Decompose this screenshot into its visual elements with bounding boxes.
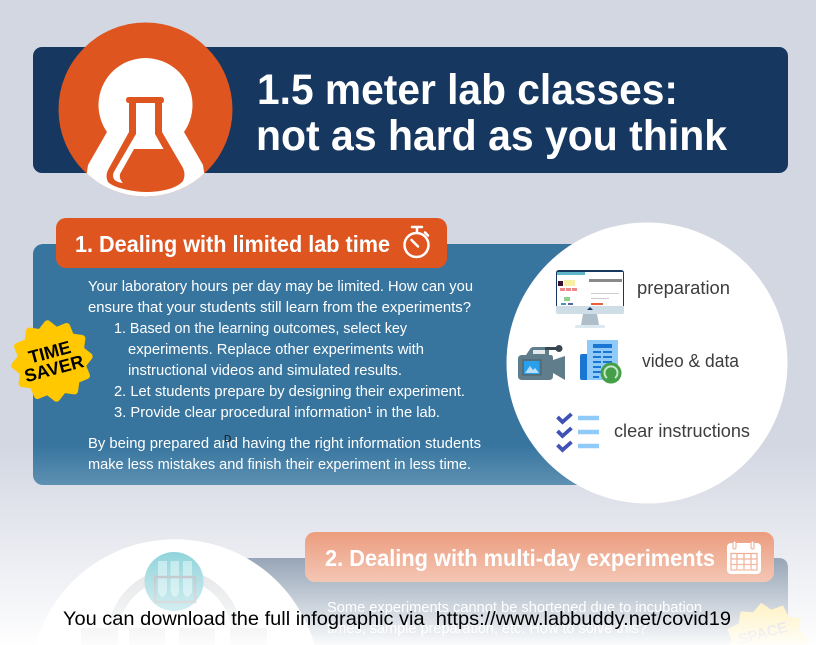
icon: stopwatch bbox=[404, 227, 428, 257]
section 2 body text: Some experiments cannot be shortened due to incubation bbox=[327, 599, 702, 616]
panel: multi-day experiments bbox=[240, 558, 788, 645]
label: video and data: video & data bbox=[642, 351, 740, 371]
panel: key measures circle bbox=[506, 222, 788, 504]
badge: time saver bbox=[8, 317, 96, 405]
title text bbox=[256, 66, 727, 160]
stray letter: D bbox=[224, 434, 231, 445]
section 1 body text: 3. Provide clear procedural information¹ in the lab. bbox=[114, 404, 440, 421]
panel: test tube circle bbox=[35, 539, 315, 645]
badge: time saver: TIME bbox=[26, 337, 73, 368]
heading: section 2 bbox=[305, 532, 774, 582]
section 2 body text bbox=[327, 599, 702, 637]
section 1 body text bbox=[88, 278, 481, 473]
icon: calendar bbox=[727, 541, 761, 574]
section 1 body text: By being prepared and having the right information students bbox=[88, 435, 481, 452]
label: clear instructions: clear instructions bbox=[614, 421, 750, 441]
section 1 body text: experiments. Replace other experiments with bbox=[128, 341, 424, 358]
icon: video camera bbox=[518, 345, 565, 380]
footer download note: You can download the full infographic via https://www.labbuddy.net/covid19 bbox=[63, 608, 731, 630]
heading: section 2: 2. Dealing with multi-day experiments bbox=[325, 545, 715, 571]
icon: monitor bbox=[556, 270, 624, 328]
icon: data document bbox=[580, 340, 622, 384]
icon: folders bbox=[81, 628, 267, 645]
icon: checklist bbox=[558, 414, 599, 450]
section 1 body text: instructional videos and simulated results. bbox=[128, 362, 402, 379]
icon: test tubes bbox=[144, 552, 204, 611]
badge: space saver bbox=[728, 603, 809, 645]
section 1 body text: make less mistakes and finish their experiment in less time. bbox=[88, 456, 471, 473]
section 1 body text: ensure that your students still learn from the experiments? bbox=[88, 299, 471, 316]
heading: section 1 bbox=[56, 218, 447, 268]
section 1 body text: Your laboratory hours per day may be limited. How can you bbox=[88, 278, 473, 295]
section 1 body text: 2. Let students prepare by designing their experiment. bbox=[114, 383, 465, 400]
panel: limited lab time bbox=[33, 244, 633, 485]
title text: not as hard as you think bbox=[256, 112, 727, 160]
badge: time saver: SAVER bbox=[22, 351, 86, 386]
label: preparation: preparation bbox=[637, 278, 730, 298]
arc ring bbox=[113, 574, 237, 630]
title banner bbox=[33, 22, 788, 200]
icon: flask logo bbox=[58, 22, 232, 200]
heading: section 1: 1. Dealing with limited lab time bbox=[75, 231, 390, 257]
fade to white bbox=[0, 445, 816, 645]
title text: 1.5 meter lab classes: bbox=[257, 66, 678, 114]
section 1 body text: 1. Based on the learning outcomes, select key bbox=[114, 320, 407, 337]
section 2 body text: times, sample preparation, etc. How to solve this? bbox=[327, 620, 647, 637]
